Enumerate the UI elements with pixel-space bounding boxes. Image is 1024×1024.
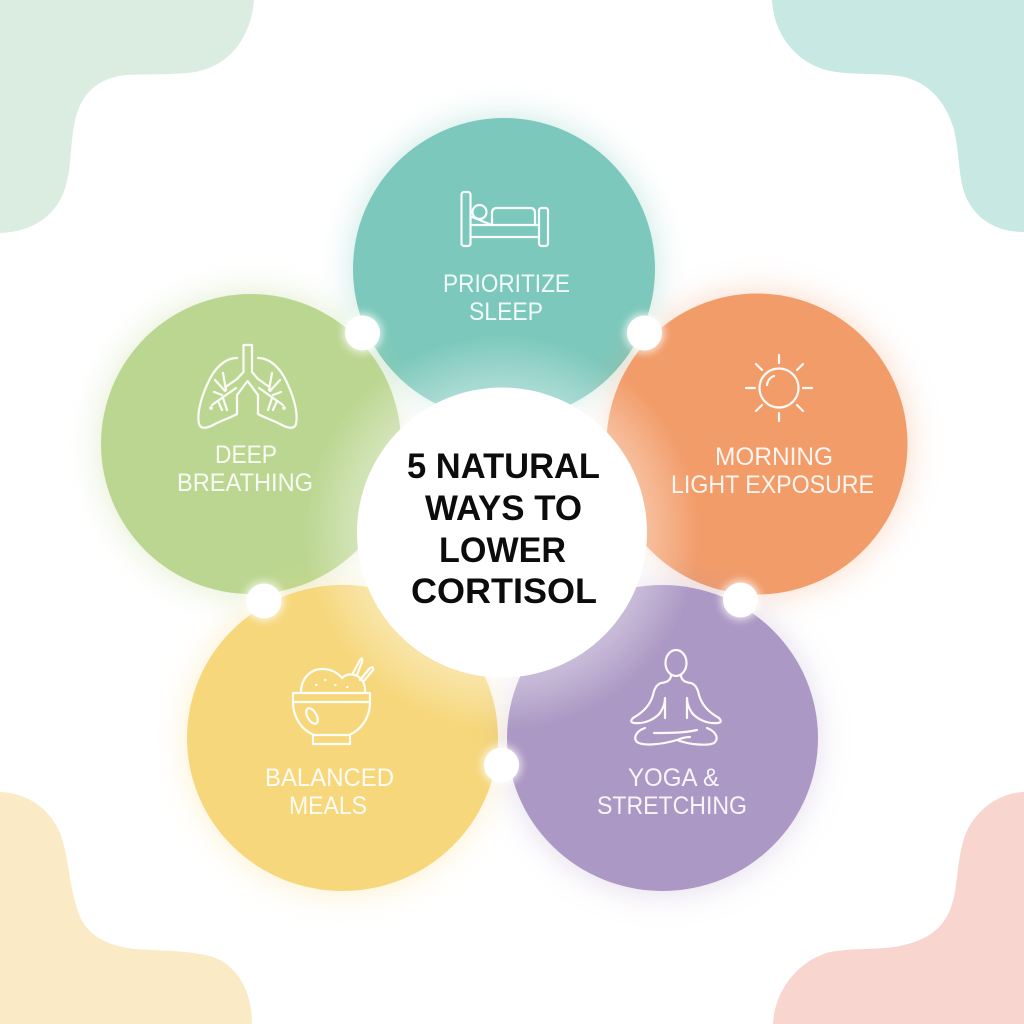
label: balanced meals — [265, 764, 394, 820]
title: LOWER — [439, 531, 566, 570]
label: morning light exposure: LIGHT EXPOSURE — [671, 471, 874, 499]
title: WAYS TO — [425, 489, 582, 528]
corner shape: top right teal — [772, 0, 1024, 232]
label: yoga and stretching: STRETCHING — [597, 792, 747, 820]
panel: deep breathing — [100, 293, 402, 595]
icon: lungs — [198, 345, 297, 428]
corner shape: top left green — [0, 0, 254, 233]
label: deep breathing: DEEP — [215, 441, 277, 469]
label: prioritize sleep: SLEEP — [469, 298, 543, 326]
label: deep breathing — [177, 441, 313, 497]
label: prioritize sleep — [443, 270, 570, 326]
connector dot: left — [244, 581, 284, 621]
label: deep breathing: BREATHING — [177, 469, 313, 497]
title: 5 NATURAL — [407, 447, 600, 486]
center circle with title — [357, 388, 647, 678]
label: morning light exposure: MORNING — [715, 443, 833, 471]
panel: yoga and stretching — [507, 584, 818, 892]
label: yoga and stretching — [597, 764, 747, 820]
connector dot: top right — [624, 313, 664, 353]
title — [407, 447, 600, 611]
icon: rice bowl — [293, 658, 373, 744]
label: morning light exposure — [671, 443, 874, 499]
center glow — [304, 334, 700, 730]
panel: balanced meals — [187, 584, 498, 892]
label: yoga and stretching: YOGA & — [628, 764, 719, 792]
icon: bed — [462, 192, 548, 246]
connector dot: bottom — [482, 745, 522, 785]
connector dot: top left — [342, 313, 382, 353]
label: prioritize sleep: PRIORITIZE — [443, 270, 570, 298]
panel: morning light exposure — [606, 293, 908, 595]
corner shape: bottom left yellow — [0, 792, 252, 1024]
label: balanced meals: MEALS — [289, 792, 367, 820]
icon: sun — [746, 355, 812, 421]
title: CORTISOL — [411, 572, 597, 611]
corner shape: bottom right pink — [773, 792, 1024, 1024]
icon: meditating figure — [631, 650, 721, 745]
panel: prioritize sleep — [353, 118, 655, 420]
label: balanced meals: BALANCED — [265, 764, 394, 792]
connector dot: right — [720, 580, 760, 620]
